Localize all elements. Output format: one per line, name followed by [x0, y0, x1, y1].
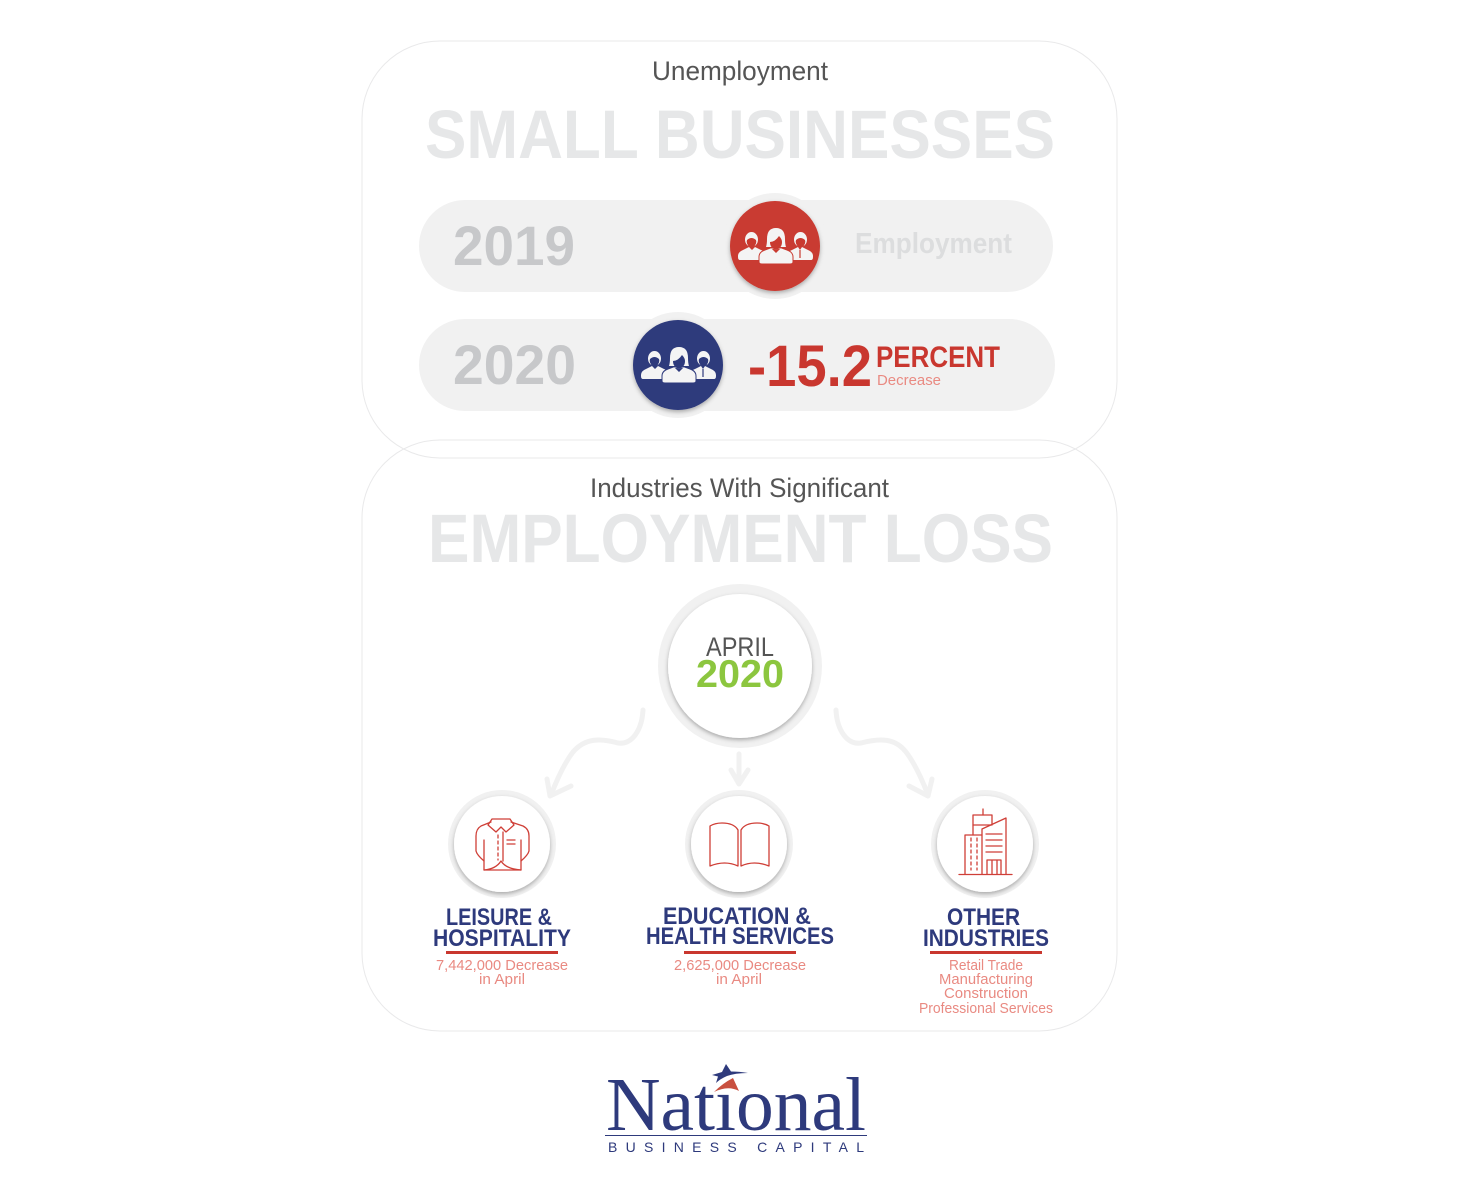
column: leisure and hospitality: HOSPITALITY	[433, 925, 571, 952]
column: other industries	[919, 790, 1053, 1017]
row: 2019 employment	[419, 193, 1053, 299]
column: other industries: Construction	[944, 985, 1028, 1002]
stat: minus 15.2 percent decrease: -15.2	[748, 334, 872, 399]
column: other industries: Retail Trade	[949, 957, 1023, 974]
panel: industries with employment loss	[362, 440, 1117, 1031]
section label: unemployment: Unemployment	[652, 56, 828, 86]
arrow: to other industries	[836, 710, 932, 796]
stat: minus 15.2 percent decrease	[748, 334, 1000, 399]
icon: office buildings	[931, 790, 1039, 898]
column: education and health services: HEALTH SERVICES	[646, 923, 834, 950]
column: education and health services: EDUCATION &	[663, 903, 811, 930]
icon: open book	[685, 790, 793, 898]
icon: shirt	[448, 790, 556, 898]
stat: minus 15.2 percent decrease: PERCENT	[876, 341, 1000, 374]
logo: national business capital: BUSINESS CAPITAL	[608, 1139, 864, 1155]
badge: april 2020	[658, 584, 822, 748]
heading: small businesses: SMALL BUSINESSES	[425, 96, 1055, 173]
column: other industries: OTHER	[947, 904, 1020, 931]
column: other industries: INDUSTRIES	[923, 925, 1049, 952]
arrow: to education and health	[731, 754, 748, 784]
column: education and health services: 2,625,000 Decrease	[674, 957, 806, 974]
section label: industries with significant: Industries With Significant	[590, 473, 889, 503]
arrow: to leisure and hospitality	[547, 710, 643, 796]
badge: april 2020: 2020	[696, 653, 784, 696]
column: education and health services	[646, 790, 834, 988]
column: leisure and hospitality: LEISURE &	[446, 904, 552, 931]
badge: april 2020: APRIL	[706, 632, 774, 662]
row: 2019 employment: 2019	[453, 214, 575, 277]
column: leisure and hospitality	[433, 790, 571, 988]
heading: employment loss: EMPLOYMENT LOSS	[428, 500, 1053, 577]
column: other industries: Manufacturing	[939, 971, 1033, 988]
panel: small businesses unemployment	[362, 41, 1117, 1155]
row: 2020 employment change: 2020	[453, 333, 576, 396]
column: other industries: Professional Services	[919, 1000, 1053, 1017]
logo: national business capital: National	[606, 1063, 866, 1147]
icon: blue employees circle	[625, 312, 731, 418]
column: education and health services: in April	[716, 971, 762, 988]
row: 2020 employment change	[419, 312, 1055, 418]
column: leisure and hospitality: in April	[479, 971, 525, 988]
icon: red employees circle	[722, 193, 828, 299]
column: leisure and hospitality: 7,442,000 Decrease	[436, 957, 568, 974]
stat: minus 15.2 percent decrease: Decrease	[877, 372, 941, 389]
row: 2019 employment: Employment	[855, 228, 1012, 260]
